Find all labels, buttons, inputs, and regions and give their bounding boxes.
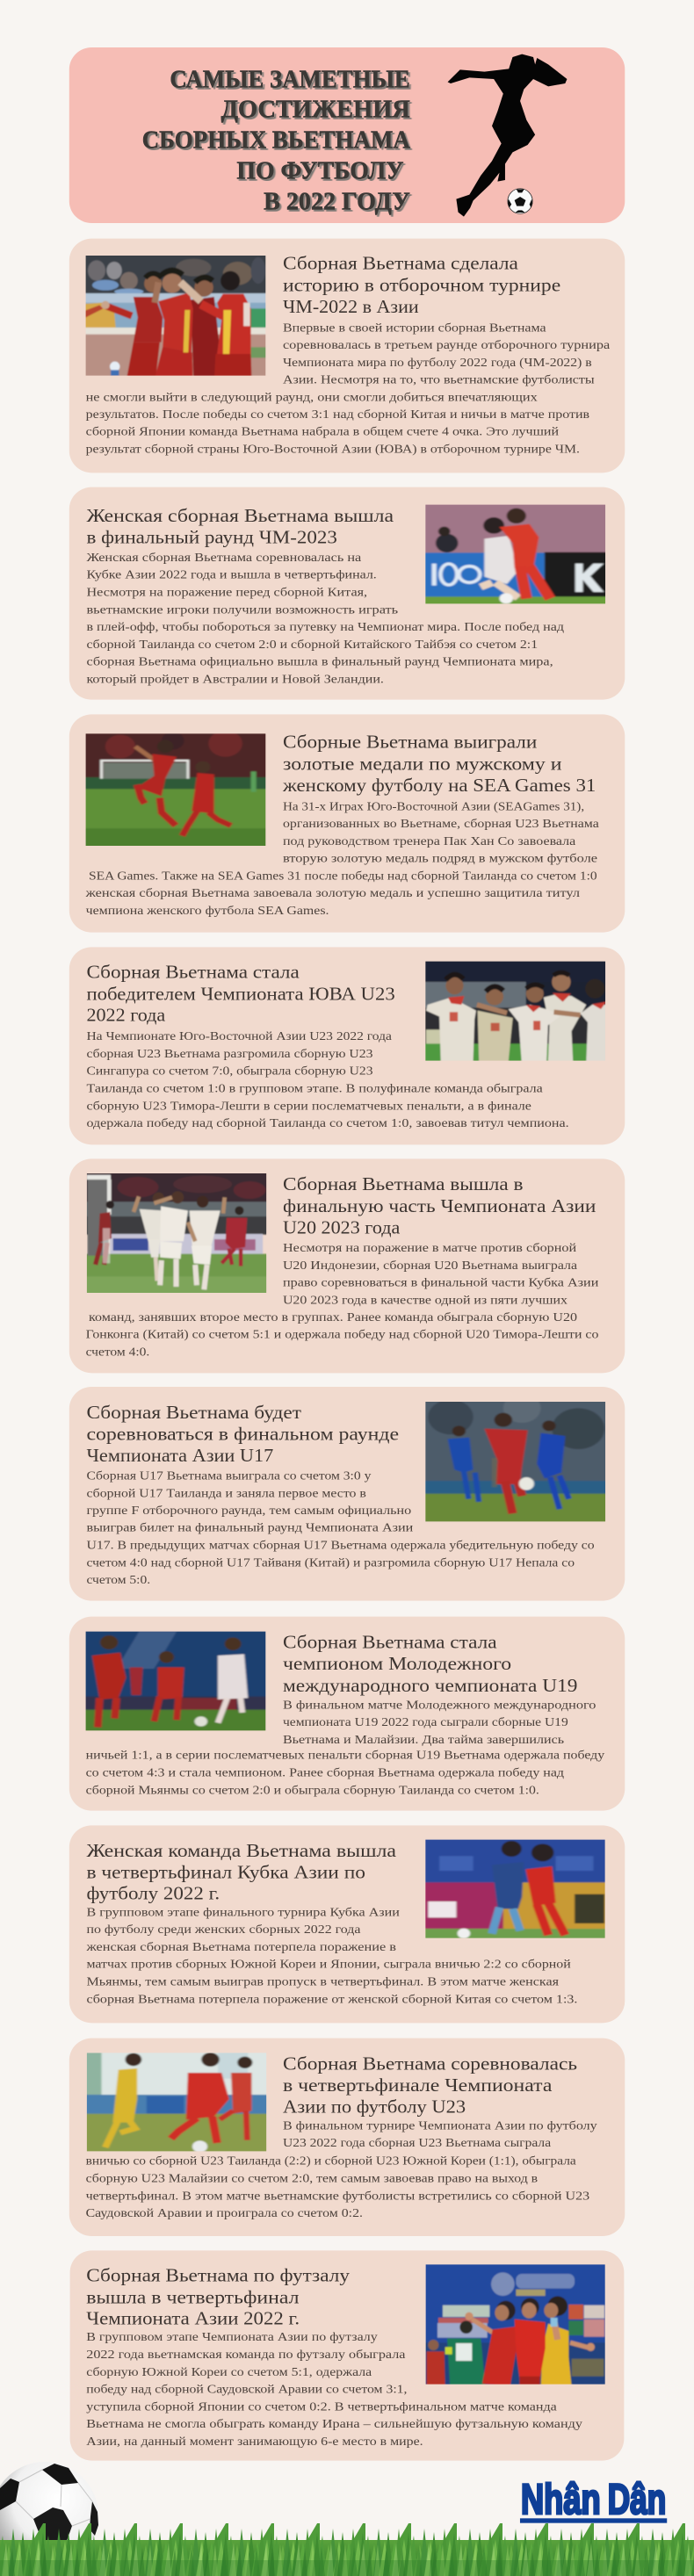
photo: red team celebrating <box>86 256 265 376</box>
heading: Сборная Вьетнама сделала <box>283 253 518 274</box>
panel: World Cup 2022 qualifiers <box>69 239 625 473</box>
body text: В финальном матче Молодежного международного <box>283 1699 596 1712</box>
heading: золотые медали по мужскому и <box>283 754 562 775</box>
body text: Азии, на данный момент занимающую 6-е место в мире. <box>86 2435 423 2448</box>
body text: счетом 4:0. <box>86 1346 149 1359</box>
heading: Сборные Вьетнама выиграли <box>283 732 537 753</box>
heading: футболу 2022 г. <box>86 1883 220 1904</box>
body text: сборная Вьетнама официально вышла в финальный раунд Чемпионата мира, <box>86 655 553 668</box>
body text: На Чемпионате Юго-Восточной Азии U23 2022 года <box>86 1030 392 1043</box>
heading: в четвертьфинале Чемпионата <box>283 2075 553 2096</box>
body text <box>86 1699 604 1797</box>
body text: соревновалась в третьем раунде отборочного турнира <box>283 339 610 351</box>
body text: сборную Южной Кореи со счетом 5:1, одержала <box>86 2365 372 2378</box>
body text: SEA Games. Также на SEA Games 31 после победы над сборной Таиланда со счетом 1:0 <box>89 869 597 883</box>
panel: women's team World Cup 2023 <box>69 487 625 700</box>
body text <box>86 2119 597 2219</box>
heading: ЧМ-2022 в Азии <box>283 297 419 317</box>
title <box>142 65 410 215</box>
body text: сборной Таиланда со счетом 2:0 и сборной Китайского Тайбэя со счетом 2:1 <box>86 639 538 651</box>
heading <box>86 1841 396 1904</box>
body text: Сингапура со счетом 7:0, обыграла сборную U23 <box>86 1064 373 1078</box>
body text: чемпионата U19 2022 года сыграли сборные U19 <box>283 1716 568 1728</box>
photo: U23 match <box>86 2053 267 2152</box>
body text <box>86 1030 569 1129</box>
heading: чемпионом Молодежного <box>283 1654 511 1674</box>
photo: U19 match <box>86 1632 265 1730</box>
heading <box>283 253 560 317</box>
panel: women's Asian Cup quarter-final <box>69 1825 625 2023</box>
heading: Чемпионата Азии 2022 г. <box>86 2308 300 2328</box>
heading <box>86 506 394 548</box>
body text <box>86 2330 582 2448</box>
photo: women's match <box>425 504 606 604</box>
panel: U19 international champions <box>69 1617 625 1811</box>
panel: U20 Asian Cup 2023 <box>69 1158 625 1373</box>
heading: соревноваться в финальном раунде <box>86 1424 399 1445</box>
body text: вничью со сборной U23 Таиланда (2:2) и сборной U23 Южной Кореи (1:1), обыграла <box>86 2154 576 2168</box>
panel: SEA Games 31 gold medals <box>69 714 625 933</box>
body text: Женская сборная Вьетнама соревновалась на <box>86 552 361 564</box>
title: ПО ФУТБОЛУ <box>236 156 404 184</box>
panel: futsal Asian Championship <box>70 2250 624 2461</box>
body text: U17. В предыдущих матчах сборная U17 Вьетнама одержала убедительную победу со <box>86 1539 595 1552</box>
body text: Несмотря на поражение в матче против сборной <box>283 1242 577 1254</box>
body text <box>86 321 610 456</box>
title: В 2022 ГОДУ <box>264 187 410 215</box>
body text: сборная Вьетнама потерпела поражение от женской сборной Китая со счетом 1:3. <box>86 1993 577 2006</box>
body text: команд, занявших второе место в группах. Ранее команда обыграла сборную U20 <box>89 1311 577 1324</box>
photo: white-shirted team celebrating <box>425 961 606 1061</box>
heading: Сборная Вьетнама стала <box>86 962 300 983</box>
body text: женская сборная Вьетнама завоевала золотую медаль и успешно защитила титул <box>85 887 580 899</box>
panel: U17 Asian Cup final round <box>69 1387 625 1601</box>
body text: Таиланда со счетом 1:0 в групповом этапе. В полуфинале команда обыграла <box>86 1082 543 1095</box>
body text: в плей-офф, чтобы побороться за путевку на Чемпионат мира. После побед над <box>86 621 564 633</box>
photo: U20 players celebrating <box>86 1173 267 1293</box>
body text: ничьей 1:1, а в серии послематчевых пенальти сборная U19 Вьетнама одержала победу <box>86 1749 604 1762</box>
body text: четвертьфинал. В этом матче вьетнамские футболисты встретились со сборной U23 <box>86 2190 589 2203</box>
body text: женская сборная Вьетнама потерпела поражение в <box>85 1941 396 1953</box>
body text: организованных во Вьетнаме, сборная U23 Вьетнама <box>283 818 599 830</box>
body text: В групповом этапе Чемпионата Азии по футзалу <box>86 2330 378 2343</box>
heading: в финальный раунд ЧМ-2023 <box>86 527 337 548</box>
body text: уступила сборной Японии со счетом 0:2. В четвертьфинальном матче команда <box>86 2399 557 2413</box>
heading <box>86 1403 399 1466</box>
heading <box>283 1174 596 1238</box>
body text: U20 Индонезии, сборная U20 Вьетнама выиграла <box>283 1259 577 1272</box>
body text: Саудовской Аравии и проиграла со счетом 0:2. <box>86 2207 363 2219</box>
body text: Впервые в своей истории сборная Вьетнама <box>283 321 546 335</box>
heading: Сборная Вьетнама по футзалу <box>86 2265 350 2285</box>
body text: Азии. Несмотря на то, что вьетнамские футболисты <box>283 373 595 386</box>
body text: На 31-х Играх Юго-Восточной Азии (SEAGames 31), <box>283 800 584 813</box>
heading: Чемпионата Азии U17 <box>86 1446 273 1466</box>
heading <box>283 1632 577 1696</box>
body text: победу над сборной Саудовской Аравии со счетом 3:1, <box>86 2382 407 2396</box>
heading <box>282 732 596 796</box>
body text: по футболу среди женских сборных 2022 года <box>86 1923 360 1936</box>
body text: вьетнамские игроки получили возможность играть <box>86 603 398 617</box>
photo: women's Asian Cup match <box>425 1839 605 1938</box>
body text: результат сборной страны Юго-Восточной Азии (ЮВА) в отборочном турнире ЧМ. <box>86 443 580 456</box>
title: ДОСТИЖЕНИЯ <box>220 95 410 123</box>
heading: вышла в четвертьфинал <box>86 2287 300 2307</box>
body text: В финальном турнире Чемпионата Азии по футболу <box>283 2119 597 2132</box>
heading: Сборная Вьетнама стала <box>283 1632 497 1653</box>
heading <box>283 2053 577 2118</box>
body text: право соревноваться в финальной части Кубка Азии <box>283 1276 599 1289</box>
heading: победителем Чемпионата ЮВА U23 <box>86 984 395 1005</box>
body text: матчах против сборных Южной Кореи и Японии, сыграла вничью 2:2 со сборной <box>86 1958 571 1971</box>
body text: U23 2022 года сборная U23 Вьетнама сыграла <box>283 2137 551 2149</box>
heading <box>86 2265 350 2328</box>
heading: U20 2023 года <box>283 1217 401 1238</box>
body text <box>86 552 564 686</box>
body text: под руководством тренера Пак Хан Со завоевала <box>283 835 575 848</box>
body text: вторую золотую медаль подряд в мужском футболе <box>283 852 597 865</box>
heading: Азии по футболу U23 <box>283 2096 466 2118</box>
photo: two players running <box>86 733 265 846</box>
title: СБОРНЫХ ВЬЕТНАМА <box>142 126 410 154</box>
heading: Сборная Вьетнама будет <box>86 1403 301 1423</box>
logo: Nhan Dan: Nhân <box>521 2476 601 2523</box>
heading <box>86 962 395 1026</box>
heading: женскому футболу на SEA Games 31 <box>282 776 596 796</box>
body text: чемпиона женского футбола SEA Games. <box>86 905 329 917</box>
icon: football <box>508 189 532 213</box>
body text: счетом 5:0. <box>86 1574 150 1586</box>
body text: со счетом 4:3 и стала чемпионом. Ранее сборная Вьетнама одержала победу над <box>86 1766 564 1779</box>
body text: не смогли выйти в следующий раунд, они смогли добиться впечатляющих <box>86 391 538 404</box>
body text <box>85 800 599 917</box>
icon: football on grass <box>0 2462 98 2569</box>
body text: Чемпионата мира по футболу 2022 года (ЧМ-2022) в <box>283 357 592 369</box>
body text: Сборная U17 Вьетнама выиграла со счетом 3:0 у <box>86 1469 371 1483</box>
body text: Вьетнама и Малайзии. Два тайма завершились <box>283 1734 564 1746</box>
body text: Кубке Азии 2022 года и вышла в четвертьфинал. <box>86 568 377 581</box>
body text: который пройдет в Австралии и Новой Зеландии. <box>86 673 384 686</box>
heading: Сборная Вьетнама вышла в <box>283 1174 523 1194</box>
body text <box>86 1242 599 1359</box>
body text: группе F отборочного раунда, тем самым официально <box>86 1504 411 1517</box>
panel: ASEAN U23 champions <box>69 947 625 1144</box>
body text: U20 2023 года в качестве одной из пяти лучших <box>283 1294 567 1307</box>
heading: международного чемпионата U19 <box>283 1676 577 1696</box>
body text: В групповом этапе финального турнира Кубка Азии <box>86 1906 400 1919</box>
body text: выиграв билет на финальный раунд Чемпионата Азии <box>86 1521 414 1534</box>
body text: результатов. После победы со счетом 3:1 над сборной Китая и ничьи в матче против <box>86 408 590 421</box>
title panel <box>69 47 625 223</box>
body text: сборной Японии команда Вьетнама набрала в общем счете 4 очка. Это лучший <box>86 425 559 438</box>
body text: Несмотря на поражение перед сборной Китая, <box>86 586 367 599</box>
heading: 2022 года <box>86 1005 165 1026</box>
body text: сборную U23 Тимора-Лешти в серии послематчевых пенальти, а в финале <box>86 1100 531 1113</box>
grass <box>0 2523 694 2576</box>
icon: footballer silhouette <box>448 54 567 217</box>
heading: в четвертьфинал Кубка Азии по <box>86 1862 365 1883</box>
body text: сборной U17 Таиланда и заняла первое место в <box>86 1487 366 1500</box>
body text: Мьянмы, тем самым выиграв пропуск в четвертьфинал. В этом матче женская <box>86 1975 560 1988</box>
photo: U17 match <box>425 1402 606 1521</box>
body text <box>85 1906 577 2006</box>
heading: историю в отборочном турнире <box>283 275 560 296</box>
body text: сборная U23 Вьетнама разгромила сборную U23 <box>86 1048 373 1060</box>
body text: сборную U23 Малайзии со счетом 2:0, тем самым завоевав право на выход в <box>86 2172 539 2185</box>
body text: Гонконга (Китай) со счетом 5:1 и одержала победу над сборной U20 Тимора-Лешти со <box>86 1328 598 1341</box>
heading: Женская сборная Вьетнама вышла <box>86 506 394 526</box>
title: САМЫЕ ЗАМЕТНЫЕ <box>170 65 410 93</box>
heading: финальную часть Чемпионата Азии <box>283 1196 596 1216</box>
heading: Сборная Вьетнама соревновалась <box>283 2053 577 2075</box>
panel: U23 Asian Cup quarter-final <box>69 2038 625 2236</box>
body text: одержала победу над сборной Таиланда со счетом 1:0, завоевав титул чемпиона. <box>86 1117 569 1129</box>
heading: Женская команда Вьетнама вышла <box>86 1841 396 1861</box>
body text <box>86 1469 595 1586</box>
body text: счетом 4:0 над сборной U17 Тайваня (Китай) и разгромила сборную U17 Непала со <box>86 1556 575 1569</box>
body text: сборной Мьянмы со счетом 2:0 и обыграла сборную Таиланда со счетом 1:0. <box>86 1784 539 1797</box>
body text: 2022 года вьетнамская команда по футзалу обыграла <box>86 2348 406 2361</box>
photo: futsal team celebrating <box>425 2264 605 2385</box>
